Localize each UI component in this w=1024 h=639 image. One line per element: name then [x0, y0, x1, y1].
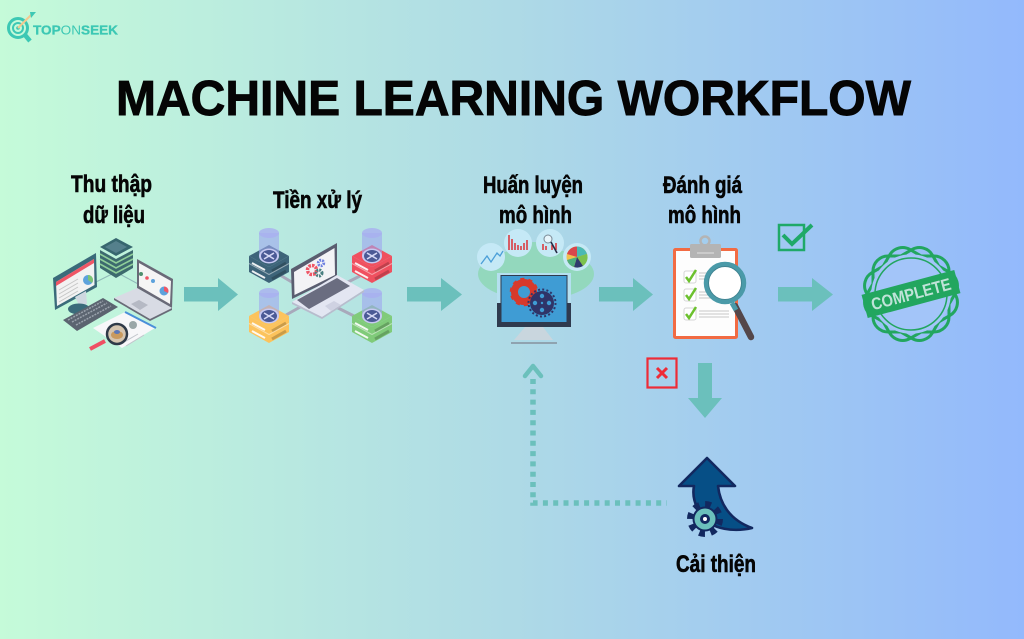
chart bubble: line chart: [477, 243, 505, 271]
arrow: dotted feedback to training: [525, 366, 667, 503]
step: model evaluation: [663, 172, 751, 339]
gear: red: [512, 280, 536, 304]
arrow: step 2 to 3: [407, 278, 462, 311]
gear: navy: [528, 290, 556, 316]
heading: Đánh giá mô hình: Đánh giá: [663, 172, 743, 199]
arrow: step 4 to complete: [778, 278, 833, 311]
icon: target with arrow: [8, 12, 36, 41]
step: model training: [477, 172, 594, 344]
stamp: complete: COMPLETE: [869, 275, 953, 314]
chart bubble: pie chart: [563, 243, 591, 271]
icon: up arrow with gear: [679, 458, 752, 533]
arrow: step 3 to 4: [599, 278, 653, 311]
heading: Cải thiện: Cải thiện: [676, 551, 756, 578]
heading: Huấn luyện mô hình: Huấn luyện: [483, 172, 583, 199]
gear: [691, 505, 719, 533]
title: MACHINE LEARNING WORKFLOW: [116, 72, 912, 126]
icon: monitor with gears and charts: [477, 229, 594, 344]
step: improvement: [676, 458, 756, 578]
icon: computers and server: [53, 238, 173, 349]
stamp: complete: [859, 242, 963, 346]
chart bubble: bar chart: [504, 229, 532, 257]
chart bubble: magnifier chart: [536, 229, 564, 257]
heading: Huấn luyện mô hình: [483, 172, 583, 229]
step: preprocessing: [249, 187, 392, 343]
icon: red cross box: [648, 358, 676, 388]
icon: green check box: [779, 225, 812, 250]
heading: Thu thập dữ liệu: Thu thập: [71, 171, 152, 198]
logo: Toponseek: [8, 12, 118, 41]
logo wordmark: TOPONSEEK: [33, 24, 118, 38]
arrow: evaluation down to improve: [688, 363, 722, 418]
heading: Thu thập dữ liệu: [71, 171, 152, 229]
icon: laptop with four servers: [249, 228, 392, 343]
heading: Huấn luyện mô hình: mô hình: [499, 202, 572, 229]
heading: Đánh giá mô hình: mô hình: [668, 202, 741, 229]
heading: Đánh giá mô hình: [663, 172, 743, 229]
arrow: step 1 to 2: [184, 278, 238, 311]
heading: Tiền xử lý: Tiền xử lý: [273, 187, 363, 214]
step: data collection: [53, 171, 173, 349]
icon: clipboard with magnifier: [673, 236, 751, 339]
heading: Thu thập dữ liệu: dữ liệu: [83, 202, 145, 229]
